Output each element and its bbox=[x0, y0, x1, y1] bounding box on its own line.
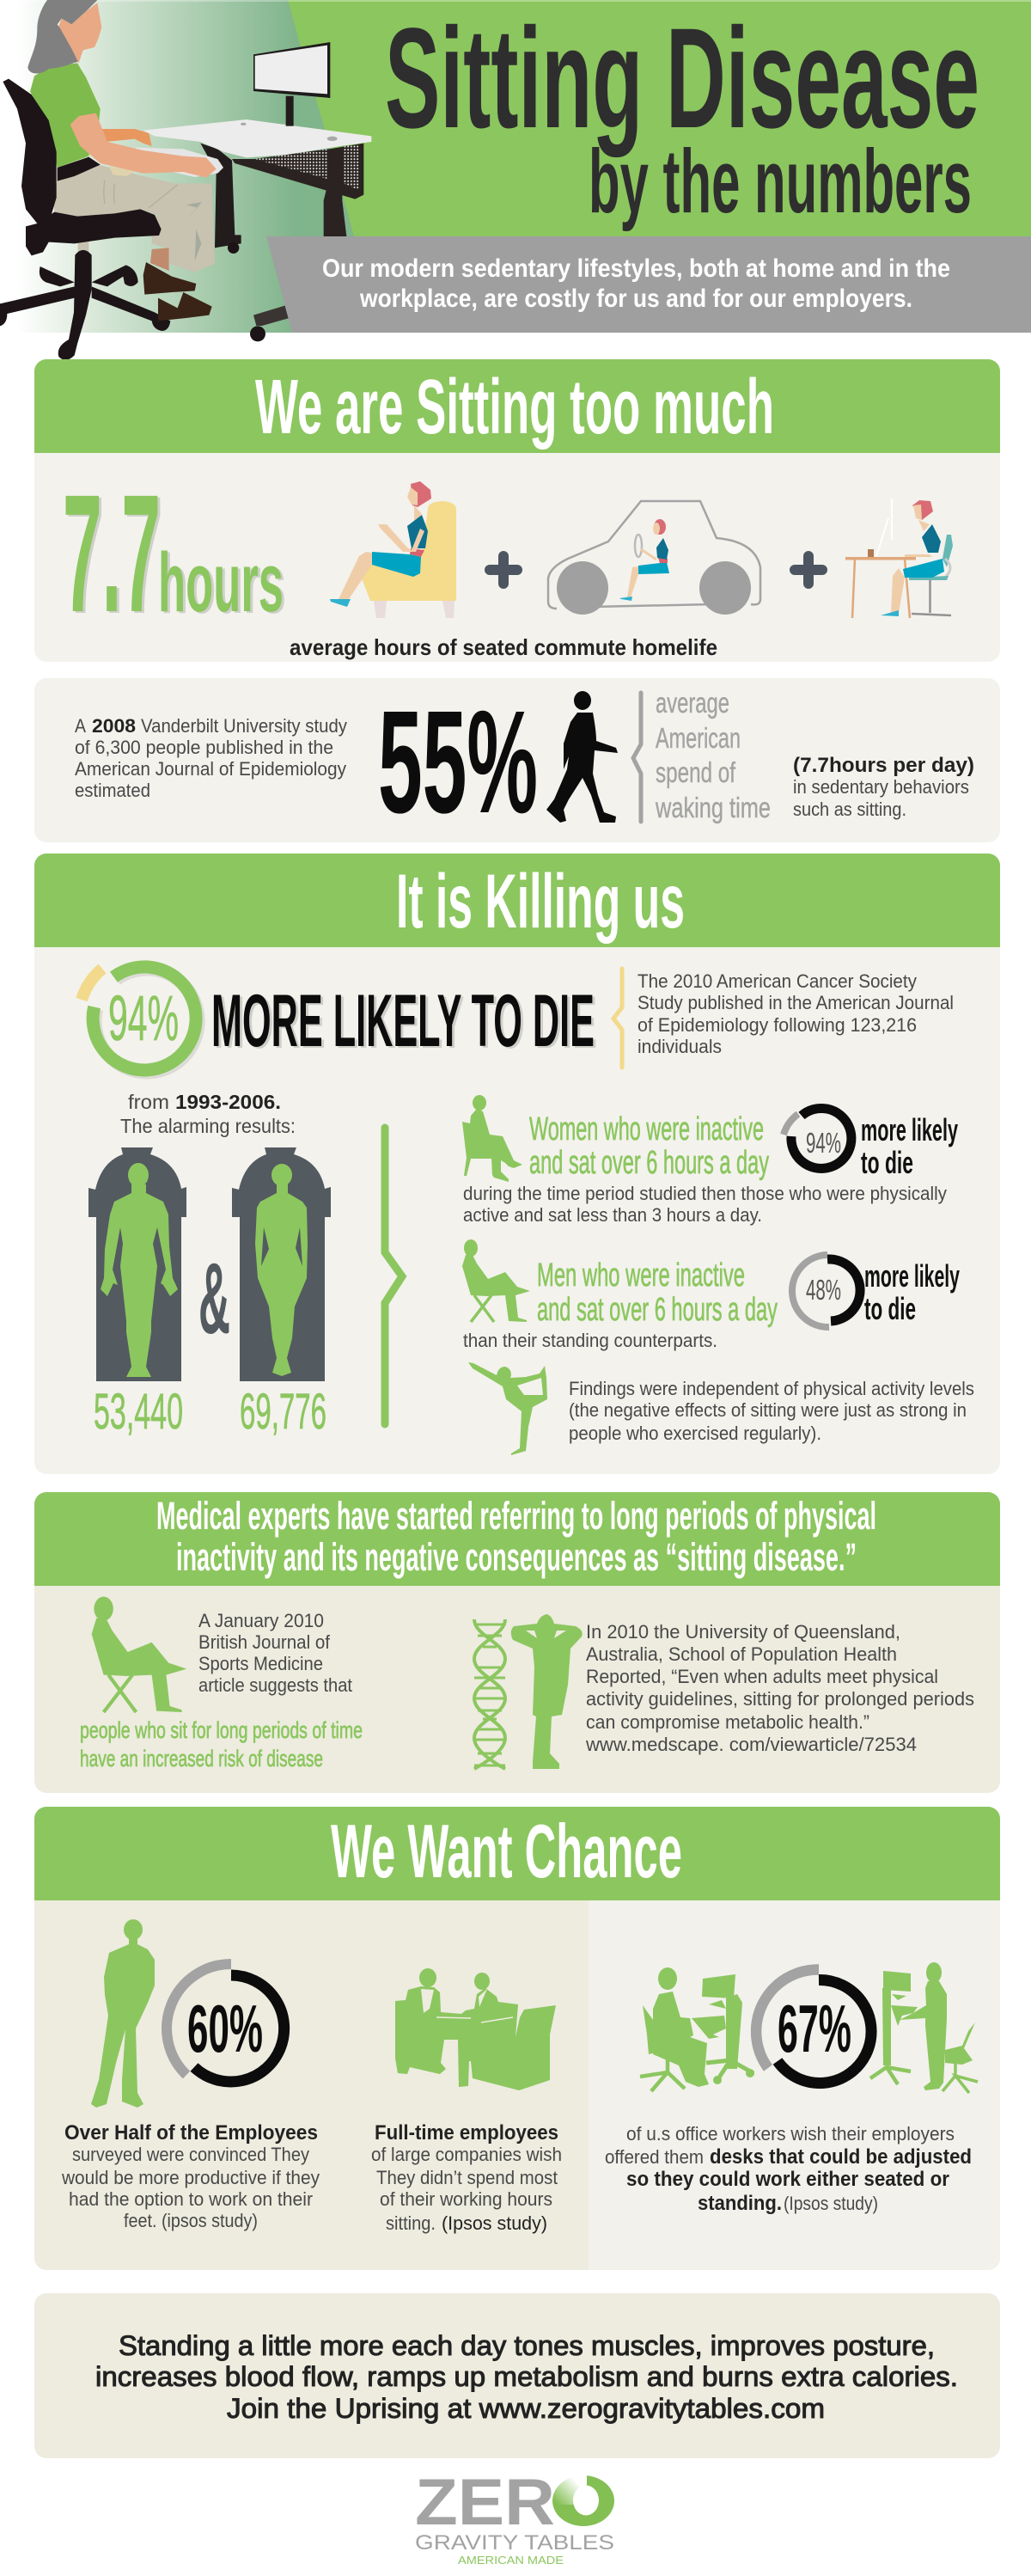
text column: employees bbox=[61, 2121, 320, 2231]
text column: office workers: (Ipsos study) bbox=[784, 2193, 878, 2214]
more likely text: more likely bbox=[861, 1112, 958, 1147]
stat: 7.7 hours: 7.7 bbox=[63, 460, 161, 647]
logo: zero gravity tables: GRAVITY TABLES bbox=[415, 2531, 614, 2555]
ring: 94 percent small: 94% bbox=[806, 1127, 841, 1159]
closing text bbox=[95, 2330, 958, 2424]
text column: employees: feet. (ipsos study) bbox=[124, 2210, 258, 2231]
bracket bbox=[385, 1128, 402, 1424]
icon: woman at desk bbox=[845, 499, 953, 618]
ring: 48 percent: 48% bbox=[806, 1274, 841, 1306]
green callout bbox=[80, 1717, 363, 1771]
study text: estimated bbox=[75, 780, 150, 801]
period text: 1993-2006. bbox=[175, 1091, 281, 1113]
more likely text: to die bbox=[861, 1145, 913, 1180]
stat: 7.7 hours: hours bbox=[158, 535, 284, 629]
gray description: spend of bbox=[656, 756, 736, 788]
icon: seated woman on office chair bbox=[0, 0, 223, 360]
numbers: 69,776 bbox=[240, 1384, 326, 1440]
text column: office workers: so they could work either seated or bbox=[626, 2168, 949, 2191]
figure: male tomb bbox=[88, 1147, 186, 1381]
period text: The alarming results: bbox=[120, 1115, 296, 1137]
more likely text bbox=[861, 1112, 958, 1180]
closing text: Standing a little more each day tones muscles, improves posture, bbox=[119, 2330, 935, 2361]
ring: 60 percent bbox=[167, 1964, 284, 2082]
ring: 94 percent bbox=[82, 967, 198, 1073]
icon: sitting man bbox=[92, 1597, 186, 1712]
text column: office workers: offered them bbox=[605, 2146, 704, 2168]
findings text bbox=[569, 1378, 974, 1444]
article text bbox=[198, 1610, 352, 1696]
quote text: can compromise metabolic health.” bbox=[586, 1711, 869, 1733]
icon: dna bbox=[474, 1619, 505, 1769]
panel: 55 percent bbox=[34, 678, 1000, 844]
study text: A bbox=[75, 715, 86, 737]
text column: full-time employees: They didn’t spend most bbox=[376, 2167, 558, 2188]
study text: American Journal of Epidemiology bbox=[75, 758, 346, 780]
men text: and sat over 6 hours a day bbox=[537, 1292, 778, 1328]
closing text: increases blood flow, ramps up metabolism and burns extra calories. bbox=[95, 2361, 958, 2392]
icon: logo ring bbox=[552, 2474, 614, 2526]
findings text: Findings were independent of physical activity levels bbox=[569, 1378, 974, 1399]
quote text bbox=[585, 1621, 974, 1755]
women text: and sat over 6 hours a day bbox=[529, 1145, 769, 1181]
icon: sitting man bbox=[462, 1239, 530, 1322]
ring: 48 percent bbox=[792, 1255, 860, 1327]
numbers: 53,440 bbox=[94, 1384, 183, 1440]
heading: It is Killing us bbox=[396, 858, 685, 944]
text column: full-time employees: of their working hours bbox=[380, 2188, 552, 2210]
text column: employees: had the option to work on their bbox=[69, 2188, 313, 2210]
ring: 67 percent bbox=[756, 1969, 871, 2083]
text column: office workers: desks that could be adjusted bbox=[710, 2145, 972, 2169]
icon: desk and monitor bbox=[143, 42, 371, 341]
logo: zero gravity tables: ZER bbox=[415, 2466, 555, 2539]
text column: full-time employees: Full-time employees bbox=[375, 2121, 558, 2145]
men text: Men who were inactive bbox=[537, 1257, 745, 1294]
heading bbox=[156, 1494, 876, 1579]
men detail text: than their standing counterparts. bbox=[463, 1330, 717, 1351]
women detail text: during the time period studied then those who were physically bbox=[463, 1183, 947, 1204]
numbers bbox=[94, 1384, 326, 1440]
panel: medical experts bbox=[34, 1492, 1000, 1793]
intro text: Our modern sedentary lifestyles, both at home and in the bbox=[322, 254, 950, 283]
study text bbox=[638, 970, 954, 1057]
ring: 94 percent: 94% bbox=[108, 982, 179, 1054]
icon: plus bbox=[490, 556, 517, 584]
green callout: people who sit for long periods of time bbox=[80, 1717, 363, 1743]
study text: of Epidemiology following 123,216 bbox=[638, 1014, 917, 1036]
green callout: have an increased risk of disease bbox=[80, 1746, 323, 1771]
men text bbox=[537, 1257, 778, 1328]
study text: The 2010 American Cancer Society bbox=[638, 970, 917, 992]
text column: employees: would be more productive if they bbox=[61, 2167, 320, 2188]
icon: meeting at table bbox=[395, 1968, 556, 2090]
intro text: workplace, are costly for us and for our employers. bbox=[359, 285, 912, 313]
study text: individuals bbox=[638, 1036, 722, 1057]
caption: average hours of seated commute homelife bbox=[290, 634, 717, 660]
text column: office workers bbox=[605, 2123, 972, 2215]
gray description: average bbox=[656, 687, 729, 719]
title bbox=[385, 0, 979, 232]
article text: A January 2010 bbox=[198, 1610, 324, 1631]
icon: standing man bbox=[91, 1919, 155, 2108]
panel: we want chance bbox=[34, 1807, 1000, 2270]
icon: office workers at adjustable desks bbox=[640, 1962, 978, 2093]
header banner bbox=[0, 0, 1031, 360]
icon: car with driver bbox=[548, 501, 760, 615]
women detail text: active and sat less than 3 hours a day. bbox=[463, 1204, 762, 1226]
quote text: activity guidelines, sitting for prolonged periods bbox=[586, 1688, 974, 1710]
gray description bbox=[655, 687, 771, 823]
study text: 2008 bbox=[92, 715, 136, 737]
text column: full-time employees: of large companies wish bbox=[371, 2144, 562, 2165]
panel: it is killing us bbox=[34, 854, 1000, 1474]
findings text: (the negative effects of sitting were just as strong in bbox=[569, 1399, 967, 1421]
findings text: people who exercised regularly). bbox=[569, 1423, 821, 1444]
heading: We Want Chance bbox=[331, 1808, 682, 1894]
period text: from bbox=[128, 1091, 169, 1113]
intro text bbox=[322, 254, 950, 313]
stat: 55%: 55% bbox=[378, 681, 538, 844]
text column: full-time employees: sitting. bbox=[386, 2212, 436, 2234]
quote text: In 2010 the University of Queensland, bbox=[586, 1621, 900, 1643]
icon: sitting woman bbox=[462, 1095, 522, 1182]
icon: standing man hands behind head bbox=[511, 1614, 583, 1769]
study text: Vanderbilt University study bbox=[141, 715, 347, 737]
text column: employees: Over Half of the Employees bbox=[64, 2121, 318, 2145]
icon: walking person bbox=[546, 691, 618, 823]
bracket bbox=[613, 969, 622, 1068]
study text bbox=[75, 715, 347, 801]
ring: 60 percent: 60% bbox=[187, 1991, 263, 2066]
gray description: waking time bbox=[655, 792, 771, 823]
gray intro band bbox=[266, 236, 1031, 333]
article text: article suggests that bbox=[198, 1674, 352, 1696]
figure: female tomb bbox=[232, 1147, 331, 1381]
panel: we are sitting too much bbox=[34, 359, 1000, 662]
quote text: Australia, School of Population Health bbox=[586, 1643, 897, 1665]
study text: of 6,300 people published in the bbox=[75, 737, 333, 758]
women text: Women who were inactive bbox=[529, 1111, 764, 1147]
logo: zero gravity tables: AMERICAN MADE bbox=[458, 2554, 564, 2567]
women detail text bbox=[463, 1183, 947, 1226]
hours per day text: such as sitting. bbox=[793, 798, 906, 820]
ring: 67 percent: 67% bbox=[778, 1991, 851, 2066]
hours per day text bbox=[793, 754, 974, 820]
icon: woman in armchair bbox=[330, 481, 456, 618]
text column: employees: surveyed were convinced They bbox=[72, 2144, 309, 2165]
text column: office workers: of u.s office workers wish their employers bbox=[626, 2123, 955, 2145]
icon: yoga figure bbox=[468, 1362, 547, 1455]
more likely text: to die bbox=[864, 1291, 916, 1326]
period text bbox=[120, 1091, 296, 1137]
gray description: American bbox=[656, 722, 741, 754]
women text bbox=[529, 1111, 769, 1181]
text column: full-time employees bbox=[371, 2121, 562, 2234]
hours per day text: in sedentary behaviors bbox=[793, 776, 969, 798]
more likely text: more likely bbox=[864, 1258, 960, 1294]
article text: British Journal of bbox=[198, 1631, 331, 1653]
icon: plus bbox=[795, 556, 822, 584]
article text: Sports Medicine bbox=[198, 1653, 323, 1674]
ring: 94 percent small bbox=[784, 1108, 851, 1168]
panel: closing call to action bbox=[34, 2293, 1000, 2458]
more likely text bbox=[864, 1258, 960, 1326]
logo: zero gravity tables bbox=[415, 2466, 614, 2567]
bracket bbox=[633, 693, 641, 822]
panel: it is killing us: & bbox=[198, 1242, 230, 1355]
closing text: Join the Uprising at www.zerogravitytables.com bbox=[227, 2393, 825, 2424]
quote text: Reported, “Even when adults meet physical bbox=[586, 1666, 938, 1687]
text column: full-time employees: (Ipsos study) bbox=[442, 2212, 547, 2234]
hours per day text: (7.7hours per day) bbox=[793, 754, 974, 777]
headline: more likely to die: MORE LIKELY TO DIE bbox=[211, 980, 595, 1062]
quote text: www.medscape. com/viewarticle/72534 bbox=[585, 1734, 917, 1755]
text column: office workers: standing. bbox=[698, 2192, 782, 2215]
study text: Study published in the American Journal bbox=[638, 992, 954, 1013]
